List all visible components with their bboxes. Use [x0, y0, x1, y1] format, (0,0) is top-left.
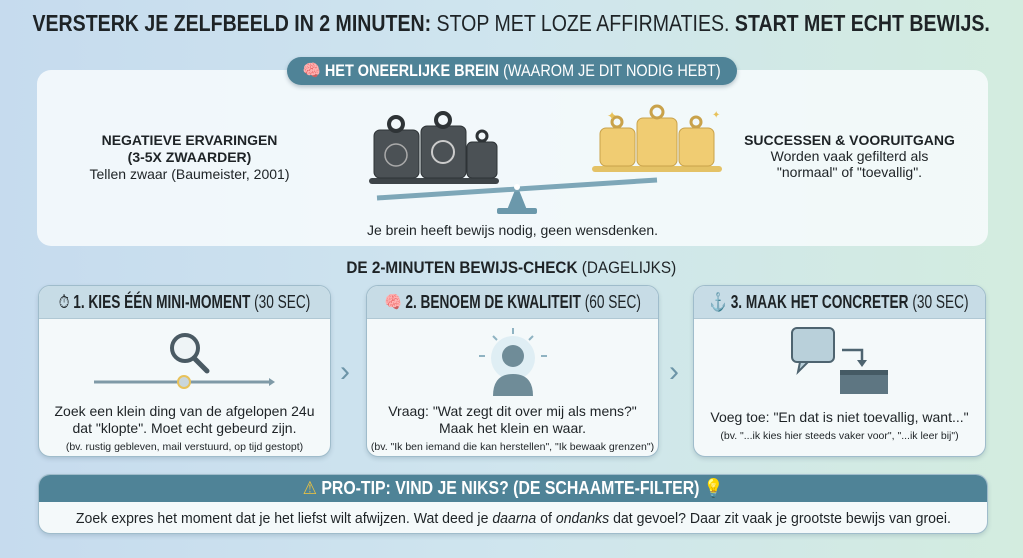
card 2: Maak het klein en waar. [439, 420, 586, 436]
pill header: 🧠 HET ONEERLIJKE BREIN (WAAROM JE DIT NODIG HEBT) [303, 61, 721, 80]
caption: Je brein heeft bewijs nodig, geen wensdenken. [367, 222, 658, 238]
icon: speech bubble to box [791, 327, 888, 394]
card 2: (bv. "Ik ben iemand die kan herstellen", "Ik bewaak grenzen") [371, 441, 654, 453]
panel: het oneerlijke brein [37, 70, 988, 246]
card 1: ⏱ 1. KIES ÉÉN MINI-MOMENT (30 SEC) [59, 292, 310, 312]
arrow: › [669, 355, 679, 388]
icon: magnifier timeline [94, 333, 275, 389]
text: negative experiences: NEGATIEVE ERVARINGEN [102, 132, 277, 148]
card 2: 🧠 2. BENOEM DE KWALITEIT (60 SEC) [384, 292, 641, 312]
illustration: scale with weights [369, 104, 722, 214]
text: successes: Worden vaak gefilterd als [771, 148, 928, 164]
card 2 [366, 285, 659, 457]
card 1 [38, 285, 331, 457]
section heading: DE 2-MINUTEN BEWIJS-CHECK (DAGELIJKS) [347, 258, 676, 277]
text: negative experiences [90, 132, 290, 182]
card 1: Zoek een klein ding van de afgelopen 24u [54, 403, 314, 419]
pro-tip: Zoek expres het moment dat je het liefst wilt afwijzen. Wat deed je daarna of ondanks dat gevoel? Daar zit vaak je grootste bewijs van groei. [76, 510, 950, 526]
text: successes [744, 132, 955, 180]
card 3: Voeg toe: "En dat is niet toevallig, want..." [710, 409, 969, 425]
pro-tip [38, 474, 988, 534]
illustration: scale with weights: ✦ [712, 110, 720, 121]
card 3 [693, 285, 986, 457]
illustration: scale with weights: ✦ [607, 109, 617, 123]
text: successes: SUCCESSEN & VOORUITGANG [744, 132, 955, 148]
text: negative experiences: (3-5X ZWAARDER) [128, 149, 251, 165]
text: successes: "normaal" of "toevallig". [777, 164, 922, 180]
card 1: dat "klopte". Moet echt gebeurd zijn. [73, 420, 296, 436]
card 2: Vraag: "Wat zegt dit over mij als mens?" [388, 403, 637, 419]
card 3: (bv. "...ik kies hier steeds vaker voor", "...ik leer bij") [720, 430, 959, 442]
card 3: ⚓ 3. MAAK HET CONCRETER (30 SEC) [710, 292, 969, 312]
title: VERSTERK JE ZELFBEELD IN 2 MINUTEN: STOP MET LOZE AFFIRMATIES. START MET ECHT BEWIJS. [33, 10, 990, 36]
pill header [287, 57, 737, 85]
arrow: › [340, 355, 350, 388]
pro-tip: ⚠ PRO-TIP: VIND JE NIKS? (DE SCHAAMTE-FILTER) 💡 [303, 478, 723, 498]
card 1: (bv. rustig gebleven, mail verstuurd, op tijd gestopt) [66, 441, 303, 453]
icon: person glow [479, 328, 547, 396]
text: negative experiences: Tellen zwaar (Baumeister, 2001) [90, 166, 290, 182]
